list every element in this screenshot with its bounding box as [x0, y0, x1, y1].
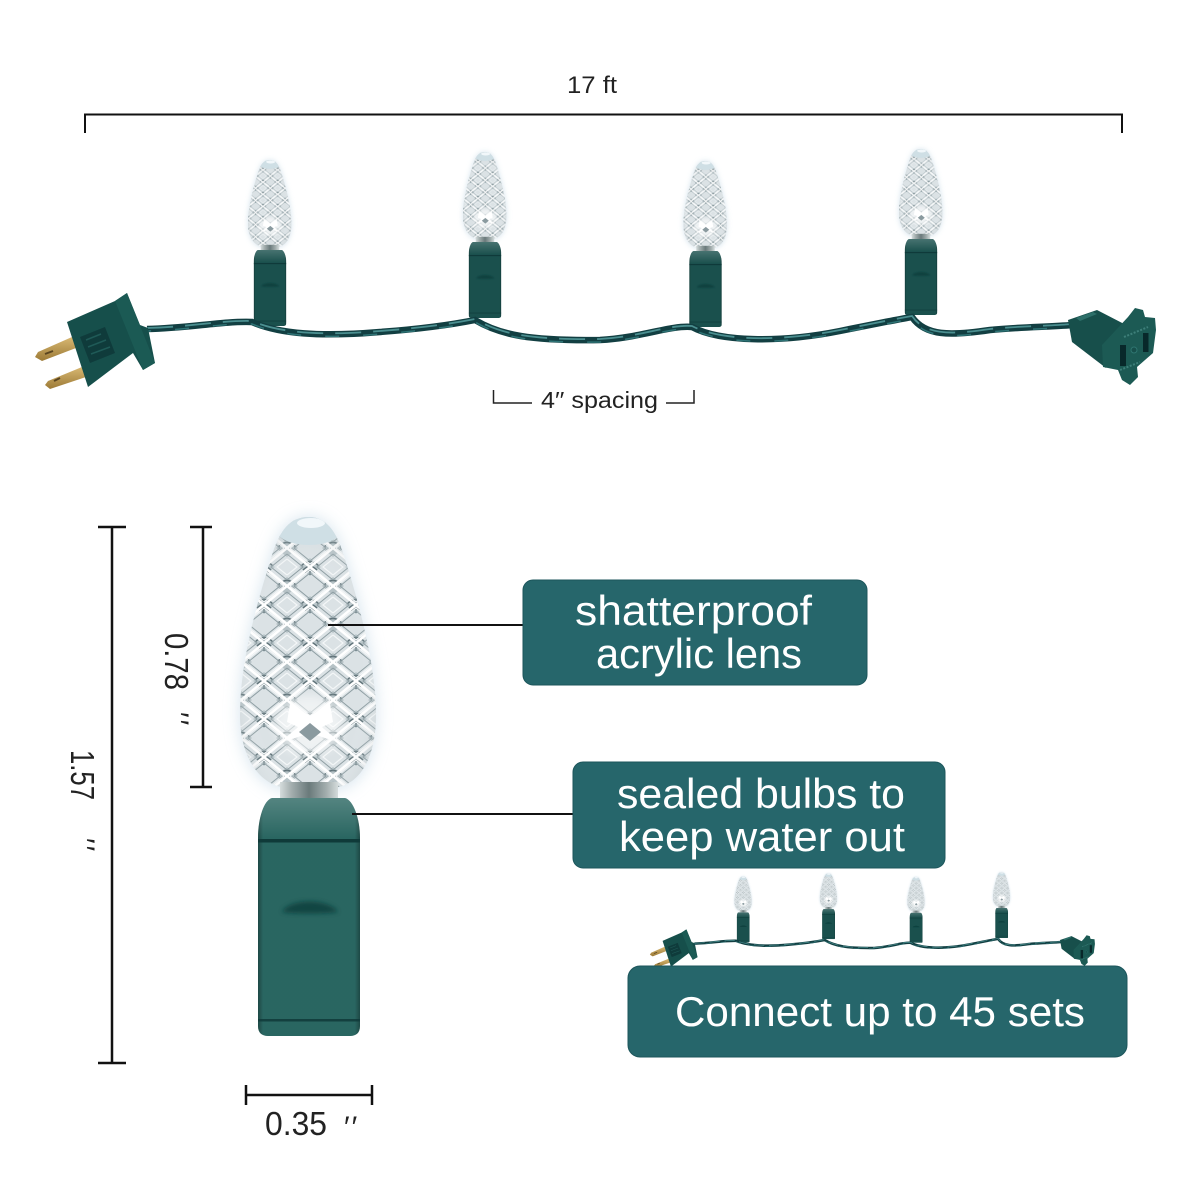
dimension: overall height 1.57 inches: 1.57 [64, 750, 101, 800]
callout: sealed bulbs: keep water out [619, 813, 905, 860]
callout: shatterproof acrylic lens [328, 580, 867, 685]
callout: shatterproof acrylic lens: acrylic lens [596, 630, 802, 677]
callout: sealed bulbs [352, 762, 945, 868]
dimension: overall height 1.57 inches [64, 527, 126, 1063]
dimension: total length 17 ft: 17 ft [567, 72, 617, 99]
dimension: lens height 0.78 inches [158, 527, 212, 787]
dimension: lens height 0.78 inches: 0.78 [158, 633, 195, 690]
small light string illustration [650, 871, 1095, 967]
dimension: base width 0.35 inches: ′′ [344, 1111, 359, 1144]
callout: shatterproof acrylic lens: shatterproof [575, 587, 812, 634]
dimension: overall height 1.57 inches: ′′ [67, 838, 100, 853]
dimension: total length 17 ft [85, 72, 1122, 133]
callout: connect up to 45 sets: Connect up to 45 sets [675, 988, 1085, 1035]
dimension: lens height 0.78 inches: ′′ [161, 712, 194, 727]
light string with plug, four bulbs and socket [35, 147, 1156, 389]
large bulb close-up [235, 510, 380, 1036]
callout: sealed bulbs: sealed bulbs to [617, 770, 905, 817]
dimension: base width 0.35 inches [246, 1085, 372, 1144]
dimension: 4 inch spacing: 4′′ spacing [541, 387, 658, 413]
dimension: 4 inch spacing [494, 387, 694, 413]
callout: connect up to 45 sets [628, 966, 1127, 1057]
dimension: base width 0.35 inches: 0.35 [265, 1105, 327, 1142]
